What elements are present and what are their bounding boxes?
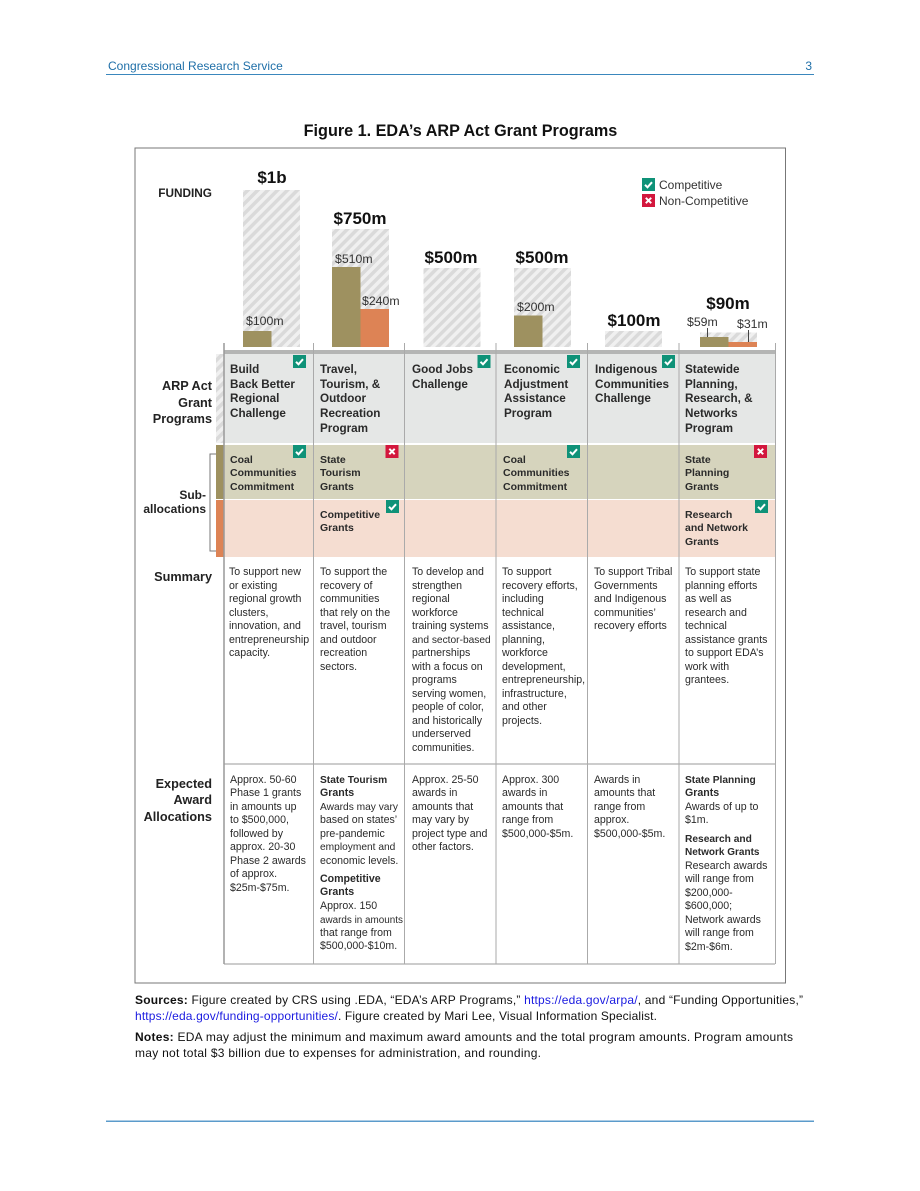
legend: [642, 178, 749, 208]
bar: Good Jobs $500m: [424, 248, 480, 347]
summary text: to support EDA’s: [685, 647, 764, 659]
expected award allocations text: in amounts up: [230, 801, 297, 813]
summary text: underserved: [412, 728, 471, 740]
summary text: and historically: [412, 715, 483, 727]
page footer rule: [106, 1120, 814, 1122]
expected award allocations text: $500,000-$5m.: [502, 828, 573, 840]
expected award allocations text: Network awards: [685, 914, 761, 926]
program: Build Back Better: Challenge: [230, 407, 286, 420]
expected award allocations text: amounts that: [412, 801, 473, 813]
program: Economic Adjustment: Assistance: [504, 392, 566, 405]
row labels: Allocations: [144, 810, 212, 824]
sources: [135, 993, 803, 1023]
summary text: with a focus on: [411, 661, 483, 673]
summary text: innovation, and: [229, 620, 301, 632]
bar: Travel, Tourism $750m: [332, 209, 400, 347]
row labels: Sub-: [179, 488, 206, 502]
bar: Statewide $90m: [687, 294, 768, 347]
program: Travel, Tourism: Recreation: [320, 407, 380, 420]
expected award allocations text: State Planning: [685, 775, 756, 786]
expected award allocations text: range from: [594, 801, 645, 813]
summary text: and outdoor: [320, 634, 377, 646]
expected award allocations text: other factors.: [412, 841, 474, 853]
expected award allocations text: $1m.: [685, 814, 709, 826]
expected award allocations text: awards in: [502, 787, 547, 799]
program: Economic Adjustment: Economic: [504, 363, 560, 376]
page header: 3: [805, 59, 812, 73]
table backgrounds: [210, 343, 776, 964]
summary text: assistance grants: [685, 634, 767, 646]
program: Good Jobs: Good Jobs: [412, 363, 474, 376]
summary text: To support: [502, 566, 552, 578]
summary text: [229, 566, 767, 754]
summary text: training systems: [412, 620, 489, 632]
summary text: research and: [685, 607, 747, 619]
bar: Indigenous $100m: [605, 311, 662, 347]
expected award allocations text: $500,000-$10m.: [320, 940, 397, 952]
row labels: Award: [173, 793, 212, 807]
sub-allocation names: Research: [685, 509, 732, 521]
notes: Notes: EDA may adjust the minimum and maximum award amounts and the total program amounts. Program amounts: [135, 1030, 793, 1044]
expected award allocations text: approx. 20-30: [230, 841, 295, 853]
summary text: To support Tribal: [594, 566, 672, 578]
program: Travel, Tourism: Program: [320, 422, 368, 435]
bar: Build Back Better $1b: [243, 168, 300, 347]
sub-allocation names: and Network: [685, 522, 748, 534]
summary text: people of color,: [412, 701, 484, 713]
sub-allocation names: Coal: [230, 454, 253, 466]
summary text: Governments: [594, 580, 658, 592]
summary text: technical: [502, 607, 544, 619]
program: Indigenous: Challenge: [595, 392, 651, 405]
figure title: Figure 1. EDA’s ARP Act Grant Programs: [304, 122, 617, 140]
program: Indigenous: Indigenous: [595, 363, 658, 376]
program: Statewide: Research, &: [685, 392, 753, 405]
sub-allocation names: Grants: [685, 536, 719, 548]
expected award allocations text: amounts that: [502, 801, 563, 813]
bar: Travel, Tourism $750m: $510m: [335, 252, 373, 266]
expected award allocations text: Research and: [685, 834, 752, 845]
expected award allocations text: range from: [502, 814, 553, 826]
row labels: Programs: [153, 412, 212, 426]
sub-allocation names: Grants: [320, 481, 354, 493]
bar: Statewide $90m: $31m: [737, 317, 768, 331]
program: Economic Adjustment: Adjustment: [504, 378, 568, 391]
summary text: infrastructure,: [502, 688, 567, 700]
summary text: workforce: [411, 607, 458, 619]
program: Build Back Better: Build: [230, 363, 259, 376]
expected award allocations text: Grants: [685, 787, 719, 799]
summary text: work with: [684, 661, 729, 673]
expected award allocations text: Network Grants: [685, 847, 760, 858]
expected award allocations text: to $500,000,: [230, 814, 289, 826]
summary text: recreation: [320, 647, 367, 659]
summary text: clusters,: [229, 607, 268, 619]
bar: Travel, Tourism $750m: $750m: [334, 209, 386, 228]
expected award allocations text: that range from: [320, 927, 392, 939]
summary text: projects.: [502, 715, 542, 727]
expected award allocations text: Competitive: [320, 873, 381, 885]
summary text: that rely on the: [320, 607, 390, 619]
summary text: recovery efforts: [594, 620, 667, 632]
row labels: [143, 379, 213, 824]
summary text: capacity.: [229, 647, 270, 659]
expected award allocations text: Approx. 50-60: [230, 774, 297, 786]
summary text: partnerships: [412, 647, 470, 659]
sub-allocation names: Planning: [685, 467, 729, 479]
sub-allocation names: Communities: [230, 467, 297, 479]
program: Statewide: Program: [685, 422, 733, 435]
expected award allocations text: Phase 1 grants: [230, 787, 301, 799]
summary text: technical: [685, 620, 727, 632]
row labels: allocations: [143, 502, 206, 516]
expected award allocations text: Grants: [320, 787, 354, 799]
summary text: including: [502, 593, 544, 605]
sub-allocation names: State: [685, 454, 711, 466]
program: Travel, Tourism: Outdoor: [320, 392, 367, 405]
page header: [106, 59, 814, 75]
expected award allocations text: Grants: [320, 886, 354, 898]
sources: https://eda.gov/funding-opportunities/. Figure created by Mari Lee, Visual Information Specialist.: [135, 1009, 657, 1023]
expected award allocations text: based on states’: [320, 814, 397, 826]
expected award allocations text: Phase 2 awards: [230, 855, 306, 867]
program: Travel, Tourism: Tourism, &: [320, 378, 381, 391]
program: Travel, Tourism: Travel,: [320, 363, 357, 376]
summary text: regional growth: [229, 593, 302, 605]
sub-allocation names: Commitment: [230, 481, 295, 493]
expected award allocations text: employment and: [320, 842, 396, 853]
expected award allocations text: Awards may vary: [320, 802, 399, 813]
summary text: To support new: [229, 566, 301, 578]
sub-allocation names: Communities: [503, 467, 570, 479]
summary text: and other: [502, 701, 547, 713]
expected award allocations text: of approx.: [230, 868, 277, 880]
sub-allocation names: Competitive: [320, 509, 380, 521]
summary text: entrepreneurship,: [502, 674, 585, 686]
expected award allocations text: Awards in: [594, 774, 640, 786]
bar: Economic Adjustment $500m: $500m: [516, 248, 568, 267]
expected award allocations text: will range from: [684, 927, 754, 939]
expected award allocations text: Research awards: [685, 860, 767, 872]
bar: Good Jobs $500m: $500m: [425, 248, 477, 267]
program: Build Back Better: Regional: [230, 392, 279, 405]
summary text: strengthen: [412, 580, 462, 592]
bar: Build Back Better $1b: $1b: [257, 168, 287, 187]
summary text: or existing: [229, 580, 277, 592]
bar chart: funding: [243, 168, 768, 347]
legend: Non-Competitive: [659, 194, 749, 208]
summary text: communities.: [412, 742, 474, 754]
summary text: as well as: [685, 593, 732, 605]
program: Economic Adjustment: Program: [504, 407, 552, 420]
bar: Travel, Tourism $750m: $240m: [362, 294, 400, 308]
summary text: entrepreneurship: [229, 634, 309, 646]
expected award allocations text: pre-pandemic: [320, 828, 385, 840]
notes: [135, 1030, 793, 1060]
sub-allocation names: Grants: [320, 522, 354, 534]
summary text: recovery of: [320, 580, 372, 592]
sub-allocation names: State: [320, 454, 346, 466]
expected award allocations text: project type and: [412, 828, 487, 840]
expected award allocations text: $500,000-$5m.: [594, 828, 665, 840]
summary text: workforce: [501, 647, 548, 659]
summary text: planning efforts: [685, 580, 757, 592]
expected award allocations text: may vary by: [412, 814, 470, 826]
summary text: To support state: [685, 566, 760, 578]
summary text: and Indigenous: [594, 593, 666, 605]
expected award allocations text: awards in amounts: [320, 915, 403, 926]
sub-allocation names: [230, 454, 748, 548]
summary text: To develop and: [412, 566, 484, 578]
summary text: serving women,: [412, 688, 486, 700]
summary text: development,: [502, 661, 566, 673]
page header: Congressional Research Service: [108, 59, 283, 73]
expected award allocations text: $25m-$75m.: [230, 882, 289, 894]
program names: [230, 363, 753, 435]
summary text: To support the: [320, 566, 387, 578]
expected award allocations text: State Tourism: [320, 775, 387, 786]
summary text: programs: [412, 674, 457, 686]
row labels: Expected: [156, 777, 212, 791]
row labels: ARP Act: [162, 379, 213, 393]
bar: Statewide $90m: $59m: [687, 315, 718, 329]
expected award allocations text: approx.: [594, 814, 629, 826]
row labels: Summary: [154, 570, 212, 584]
summary text: planning,: [502, 634, 545, 646]
row labels: Grant: [178, 396, 213, 410]
figure frame: [135, 148, 786, 983]
expected award allocations text: Approx. 150: [320, 900, 377, 912]
expected award allocations text: economic levels.: [320, 855, 398, 867]
expected award allocations text: Approx. 25-50: [412, 774, 479, 786]
expected award allocations text: amounts that: [594, 787, 655, 799]
expected award allocations text: $200,000-: [685, 887, 733, 899]
expected award allocations text: will range from: [684, 873, 754, 885]
program: Statewide: Networks: [685, 407, 738, 420]
expected award allocations text: followed by: [230, 828, 284, 840]
summary text: communities: [320, 593, 379, 605]
bar: Statewide $90m: $90m: [706, 294, 750, 313]
expected award allocations text: $600,000;: [685, 900, 732, 912]
expected award allocations text: Approx. 300: [502, 774, 559, 786]
notes: may not total $3 billion due to expenses for administration, and rounding.: [135, 1046, 541, 1060]
sources: Sources: Figure created by CRS using .EDA, “EDA’s ARP Programs,” https://eda.gov/arpa/, and “Funding Opportunities,”: [135, 993, 803, 1007]
summary text: regional: [412, 593, 450, 605]
summary text: communities’: [594, 607, 656, 619]
summary text: grantees.: [685, 674, 729, 686]
expected award allocations text: Awards of up to: [685, 801, 759, 813]
bar: Indigenous $100m: $100m: [608, 311, 660, 330]
funding label: FUNDING: [158, 186, 212, 200]
summary text: and sector-based: [412, 635, 491, 646]
program: Build Back Better: Back Better: [230, 378, 295, 391]
bar: Build Back Better $1b: $100m: [246, 314, 284, 328]
sub-allocation names: Tourism: [320, 467, 361, 479]
sub-allocation names: Grants: [685, 481, 719, 493]
sub-allocation names: Coal: [503, 454, 526, 466]
expected award allocations text: awards in: [412, 787, 457, 799]
summary text: recovery efforts,: [502, 580, 578, 592]
sub-allocation names: Commitment: [503, 481, 568, 493]
program: Statewide: Planning,: [685, 378, 738, 391]
program: Good Jobs: Challenge: [412, 378, 468, 391]
bar: Economic Adjustment $500m: [514, 248, 571, 347]
program: Indigenous: Communities: [595, 378, 670, 391]
summary text: assistance,: [502, 620, 555, 632]
legend: Competitive: [659, 178, 723, 192]
summary text: travel, tourism: [320, 620, 387, 632]
status icons: [293, 355, 768, 513]
expected award allocations text: $2m-$6m.: [685, 941, 733, 953]
bar: Economic Adjustment $500m: $200m: [517, 300, 555, 314]
program: Statewide: Statewide: [685, 363, 740, 376]
summary text: sectors.: [320, 661, 357, 673]
expected award allocations text: [230, 774, 767, 953]
